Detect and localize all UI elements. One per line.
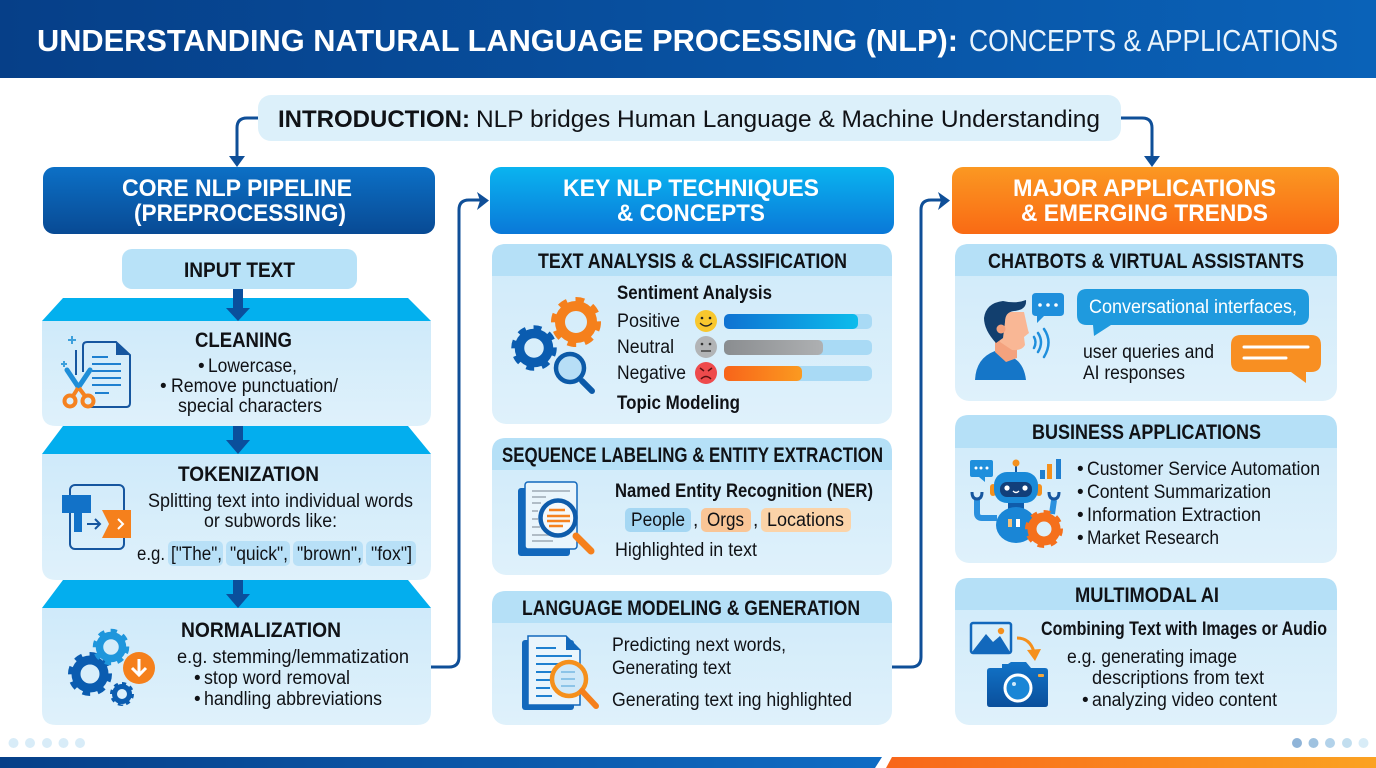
footer bar: orange xyxy=(886,757,1376,768)
arrow: pipeline to techniques xyxy=(431,192,489,667)
column header: core pipeline: (PREPROCESSING) xyxy=(134,200,346,227)
normalization steps: stop word removal xyxy=(204,668,350,689)
entity chips: Locations xyxy=(767,510,844,531)
business list: • xyxy=(1077,482,1084,503)
introduction box xyxy=(258,95,1121,141)
description: Generating text xyxy=(612,658,732,679)
tokenization description: Splitting text into individual words xyxy=(148,491,413,512)
multimodal description: e.g. generating image xyxy=(1067,647,1237,668)
NER note: Highlighted in text xyxy=(615,540,758,561)
input text box: INPUT TEXT xyxy=(184,259,295,282)
heading: TEXT ANALYSIS & CLASSIFICATION xyxy=(538,250,847,273)
sentiment row: neutral xyxy=(617,336,872,358)
token example chips: ["The", xyxy=(171,544,222,565)
heading: cleaning: CLEANING xyxy=(195,329,292,352)
entity chips: People xyxy=(631,510,685,531)
cleaning steps xyxy=(160,356,339,417)
column header: applications: & EMERGING TRENDS xyxy=(1021,200,1268,227)
icon: tokens xyxy=(62,485,131,549)
panel: business applications xyxy=(955,415,1337,563)
panel: cleaning xyxy=(42,289,431,426)
arrow: cleaning to tokenization xyxy=(226,426,250,454)
panel: normalization xyxy=(42,580,431,725)
description: Predicting next words, xyxy=(612,635,786,656)
cleaning steps: Remove punctuation/ xyxy=(171,376,339,397)
column header: applications xyxy=(952,167,1339,234)
heading: SEQUENCE LABELING & ENTITY EXTRACTION xyxy=(502,444,883,467)
heading: LANGUAGE MODELING & GENERATION xyxy=(522,597,860,620)
multimodal description xyxy=(1067,647,1278,711)
panel: text analysis and classification xyxy=(492,244,892,424)
business list: • xyxy=(1077,459,1084,480)
heading: tokenization: TOKENIZATION xyxy=(178,463,319,486)
column header: techniques xyxy=(490,167,894,234)
heading: MULTIMODAL AI xyxy=(1075,584,1219,607)
sentiment row: negative xyxy=(617,362,872,384)
icon: document with magnifier xyxy=(518,482,591,556)
speech bubble: conversational interfaces xyxy=(1077,289,1309,336)
business list: Information Extraction xyxy=(1087,505,1261,526)
arrow: input to cleaning xyxy=(226,289,250,321)
heading: BUSINESS APPLICATIONS xyxy=(1032,421,1261,444)
normalization steps: e.g. stemming/lemmatization xyxy=(177,647,409,668)
footer dots: left xyxy=(8,738,85,748)
normalization steps: • xyxy=(194,689,201,710)
column header: core pipeline xyxy=(43,167,435,234)
icon: document and scissors xyxy=(61,336,130,407)
cleaning steps: special characters xyxy=(178,396,322,417)
title: bold part: UNDERSTANDING NATURAL LANGUAGE PROCESSING (NLP): xyxy=(37,23,958,58)
entity chips xyxy=(625,508,851,532)
NER heading: Named Entity Recognition (NER) xyxy=(615,481,873,502)
panel: tokenization xyxy=(42,426,431,580)
chat description xyxy=(1083,342,1214,384)
sentiment row: positive xyxy=(617,310,872,332)
token example chips: "brown", xyxy=(297,544,362,565)
panel: language modeling and generation xyxy=(492,591,892,725)
heading: CHATBOTS & VIRTUAL ASSISTANTS xyxy=(988,250,1304,273)
icon: gears and magnifier xyxy=(514,300,598,391)
business list: Market Research xyxy=(1087,528,1219,549)
arrow: intro to applications xyxy=(1121,118,1160,167)
icon: image to camera xyxy=(971,623,1048,707)
intro label: INTRODUCTION: xyxy=(278,106,470,133)
arrow: techniques to applications xyxy=(892,192,950,667)
heading: normalization: NORMALIZATION xyxy=(181,619,341,642)
multimodal description: • xyxy=(1082,690,1089,711)
cleaning steps: Lowercase, xyxy=(208,356,297,377)
entity chips: Orgs xyxy=(707,510,744,531)
tokenization description: or subwords like: xyxy=(204,511,337,532)
intro sentence: NLP bridges Human Language & Machine Understanding xyxy=(476,106,1100,133)
normalization steps: • xyxy=(194,668,201,689)
chat description: user queries and xyxy=(1083,342,1214,363)
business list: Content Summarization xyxy=(1087,482,1271,503)
multimodal description: descriptions from text xyxy=(1092,668,1265,689)
speech bubble: orange reply xyxy=(1231,335,1321,383)
panel: chatbots and virtual assistants xyxy=(955,244,1337,401)
normalization steps xyxy=(177,647,409,710)
token example chips: e.g. xyxy=(137,544,165,565)
business list xyxy=(1077,459,1320,549)
column header: techniques: & CONCEPTS xyxy=(617,200,765,227)
business list: • xyxy=(1077,505,1084,526)
column header: core pipeline: CORE NLP PIPELINE xyxy=(122,175,352,202)
icon: document with orange magnifier xyxy=(522,636,596,710)
entity chips: , xyxy=(753,510,758,531)
topic modeling label: Topic Modeling xyxy=(617,393,740,414)
description: Generating text ing highlighted xyxy=(612,690,852,711)
footer dots: right xyxy=(1292,738,1368,748)
sentiment row: neutral: Neutral xyxy=(617,337,674,358)
sentiment row: negative: Negative xyxy=(617,363,686,384)
icon: robot with gear xyxy=(970,459,1061,546)
entity chips: , xyxy=(693,510,698,531)
cleaning steps: • xyxy=(160,376,167,397)
arrow: intro to core pipeline xyxy=(229,118,258,167)
token example chips: "fox"] xyxy=(371,544,412,565)
normalization steps: handling abbreviations xyxy=(204,689,382,710)
input text box xyxy=(122,249,357,289)
chat description: AI responses xyxy=(1083,363,1185,384)
title banner xyxy=(0,0,1376,78)
tokenization description xyxy=(148,491,413,532)
business list: • xyxy=(1077,528,1084,549)
sentiment heading: Sentiment Analysis xyxy=(617,283,772,304)
column header: techniques: KEY NLP TECHNIQUES xyxy=(563,175,819,202)
speech bubble: conversational interfaces: Conversational interfaces, xyxy=(1089,297,1297,318)
multimodal description: analyzing video content xyxy=(1092,690,1278,711)
panel: multimodal AI xyxy=(955,578,1337,725)
footer bar: blue xyxy=(0,757,882,768)
icon: person speaking xyxy=(975,293,1064,380)
description xyxy=(612,635,852,711)
business list: Customer Service Automation xyxy=(1087,459,1320,480)
multimodal subheading: Combining Text with Images or Audio xyxy=(1041,619,1327,640)
icon: gears with download xyxy=(70,631,155,704)
token example chips xyxy=(137,541,416,566)
sentiment row: positive: Positive xyxy=(617,311,680,332)
arrow: tokenization to normalization xyxy=(226,580,250,608)
column header: applications: MAJOR APPLICATIONS xyxy=(1013,175,1276,202)
cleaning steps: • xyxy=(198,356,205,377)
token example chips: "quick", xyxy=(230,544,288,565)
panel: sequence labeling and entity extraction xyxy=(492,438,892,575)
